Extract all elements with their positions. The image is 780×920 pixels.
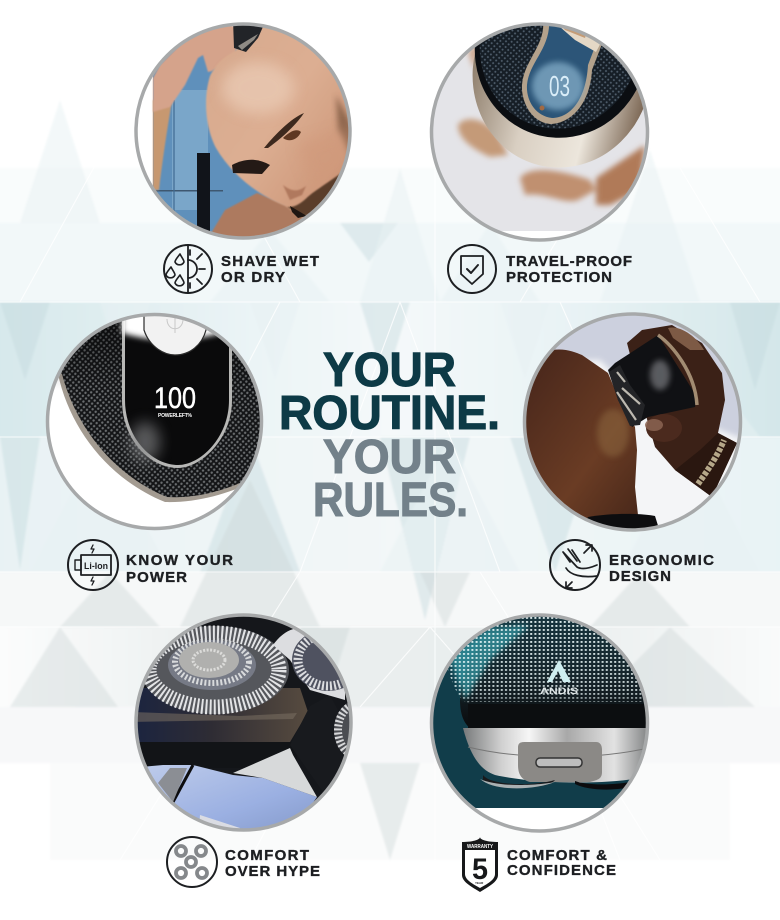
circle border: [48, 314, 262, 528]
title: [279, 344, 500, 527]
title: YOUR: [323, 344, 456, 397]
panel: shave wet or dry: [134, 20, 360, 293]
icon: 5-year warranty shield: [462, 837, 498, 892]
panel: comfort and confidence: [428, 610, 652, 892]
display caption: POWERLEFT%: [158, 413, 193, 419]
icon: five rotary blades: [167, 837, 217, 887]
label: travel-proof protection: TRAVEL-PROOF: [506, 253, 632, 270]
label: know your power: KNOW YOUR: [126, 552, 233, 569]
icon: lithium-ion battery: [68, 540, 118, 590]
photo: shaver with case display held in hand: [433, 26, 646, 238]
title: YOUR: [323, 431, 456, 484]
icon: ergonomic hand with arrows: [550, 540, 600, 590]
Andis logo mark: [547, 660, 571, 682]
label: shave wet or dry: OR DRY: [221, 269, 285, 286]
label: shave wet or dry: SHAVE WET: [221, 253, 319, 270]
icon: 5-year warranty shield: 5: [472, 853, 488, 886]
label: know your power: [126, 552, 233, 586]
icon: water drops and sun: [164, 245, 212, 293]
icon: shield with check: [448, 245, 496, 293]
label: shave wet or dry: [221, 253, 319, 286]
icon: 5-year warranty shield: WARRANTY: [467, 844, 494, 850]
label: comfort over hype: [225, 847, 320, 880]
title: ROUTINE.: [279, 387, 500, 440]
photo: man shaving his head: [152, 26, 348, 236]
label: comfort over hype: COMFORT: [225, 847, 309, 864]
label: travel-proof protection: [506, 253, 632, 286]
circle border: [432, 615, 648, 831]
label: comfort and confidence: CONFIDENCE: [507, 862, 616, 879]
icon: lithium-ion battery: Li-Ion: [84, 561, 108, 572]
label: comfort and confidence: COMFORT &: [507, 847, 607, 864]
brand name: ANDIS: [540, 686, 578, 696]
photo: hand holding shaver to head: [526, 316, 739, 528]
circle border: [136, 615, 351, 830]
label: ergonomic design: ERGONOMIC: [609, 552, 714, 569]
label: ergonomic design: [609, 552, 714, 585]
label: comfort and confidence: [507, 847, 616, 879]
panel: ergonomic design: [520, 310, 746, 590]
panel: comfort over hype: [134, 613, 353, 888]
photo: rotary shaving heads close-up: [138, 616, 350, 828]
photo: shaver battery display: [44, 310, 266, 532]
panel: travel-proof protection: [430, 22, 650, 294]
digital display: 03: [549, 71, 570, 103]
title: RULES.: [313, 474, 468, 527]
label: comfort over hype: OVER HYPE: [225, 863, 320, 880]
panel: know your power: [44, 310, 266, 590]
label: ergonomic design: DESIGN: [609, 568, 671, 585]
circle border: [432, 24, 648, 240]
label: travel-proof protection: PROTECTION: [506, 269, 612, 286]
photo: Andis shaver on teal background: [433, 616, 646, 808]
digital display: 100: [154, 382, 196, 415]
circle border: [136, 24, 350, 238]
label: know your power: POWER: [126, 569, 187, 586]
icon: 5-year warranty shield: YEAR: [475, 881, 484, 885]
circle border: [524, 314, 740, 530]
